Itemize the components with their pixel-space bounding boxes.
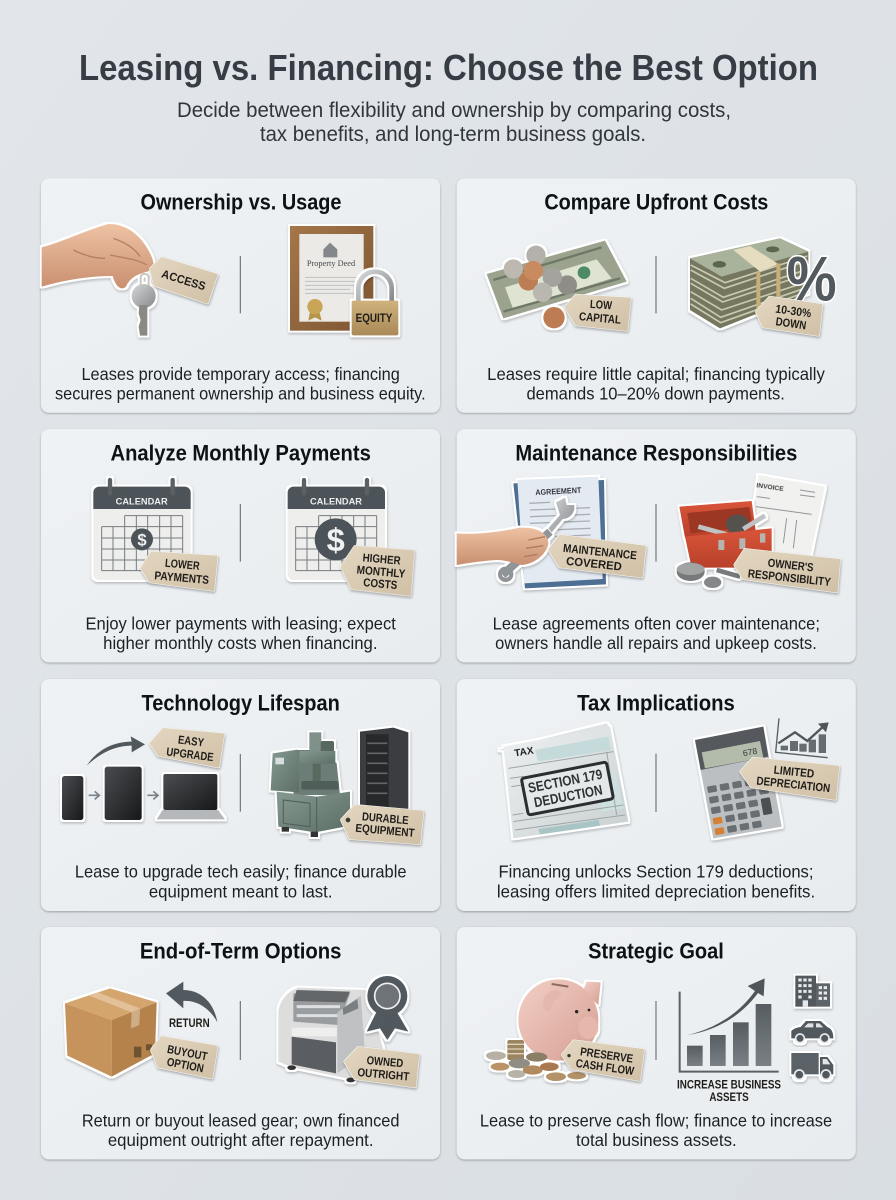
tag: low capital: LOW — [590, 298, 612, 312]
text: ownership summary: Leases provide temporary access; financing — [81, 364, 400, 384]
panel: compare upfront costs — [457, 178, 856, 413]
tag: durable equipment — [342, 806, 423, 843]
icon: award ribbon — [367, 976, 408, 1040]
text: monthly summary — [85, 613, 396, 653]
panel: ownership vs usage — [41, 178, 440, 413]
icon: tablet — [105, 767, 142, 820]
icon: car — [791, 1021, 833, 1043]
tag: maintenance covered: COVERED — [565, 555, 622, 574]
tag: preserve cash flow: CASH FLOW — [575, 1057, 635, 1078]
text: upfront summary: Leases require little capital; financing typically — [487, 364, 825, 384]
icon: truck — [791, 1053, 833, 1079]
icon: tax form with stamp: SECTION 179 — [527, 766, 604, 796]
text: ownership summary: secures permanent ownership and business equity. — [55, 383, 426, 403]
icon: piggy bank with coins — [486, 979, 601, 1081]
icon: cardboard box — [65, 988, 157, 1077]
icon: invoice — [749, 475, 825, 558]
heading: compare upfront costs: Compare Upfront Costs — [544, 189, 768, 214]
icon: small arrow one — [89, 791, 99, 799]
heading: tax implications: Tax Implications — [577, 691, 735, 716]
subtitle: Decide between flexibility and ownership by comparing costs, — [177, 99, 731, 122]
tag: owner's responsibility: OWNER'S — [767, 557, 814, 574]
tag: 10-30% down: 10-30% — [775, 303, 813, 321]
tag: low capital — [566, 295, 630, 330]
title: Leasing vs. Financing: Choose the Best Option — [79, 47, 818, 88]
tag: limited depreciation — [741, 758, 838, 799]
heading: strategic goal: Strategic Goal — [588, 938, 724, 963]
text: end-of-term summary: equipment outright after repayment. — [108, 1130, 373, 1150]
icon: upgrade arrow — [87, 736, 145, 766]
text: upfront summary — [487, 364, 825, 403]
icon: hand holding key — [42, 224, 156, 336]
tag: access — [151, 258, 217, 303]
panel: end-of-term options — [41, 927, 440, 1159]
tag: owned outright: OWNED — [366, 1054, 404, 1070]
label: increase business assets — [677, 1078, 781, 1104]
tag: higher monthly costs: HIGHER — [362, 551, 402, 568]
icon: owned machine — [278, 988, 383, 1082]
text: maintenance summary — [493, 613, 820, 653]
tag: maintenance covered: MAINTENANCE — [562, 542, 638, 563]
tag: limited depreciation: LIMITED — [773, 764, 815, 781]
icon: framed property deed — [290, 226, 373, 331]
text: end-of-term summary: Return or buyout leased gear; own financed — [82, 1111, 399, 1131]
text: tax summary — [497, 862, 815, 901]
icon: dollar bill and coins — [487, 241, 627, 318]
tag: durable equipment: EQUIPMENT — [355, 822, 415, 840]
text: technology summary: equipment meant to last. — [149, 881, 332, 901]
tag: 10-30% down — [757, 297, 822, 335]
icon: tax form with stamp: DEDUCTION — [533, 781, 604, 810]
icon: agreement documents: AGREEMENT — [535, 486, 582, 497]
text: technology summary: Lease to upgrade tech easily; finance durable — [75, 862, 406, 882]
icon: calendar large dollar: $ — [327, 521, 345, 558]
text: ownership summary — [55, 364, 426, 403]
panel: analyze monthly payments — [41, 429, 440, 662]
heading: maintenance responsibilities: Maintenance Responsibilities — [515, 441, 797, 466]
panel: strategic goal — [457, 927, 856, 1159]
icon: small growth chart — [776, 718, 829, 758]
icon: calculator — [695, 727, 782, 838]
tag: preserve cash flow: PRESERVE — [579, 1045, 634, 1066]
tag: lower payments: LOWER — [165, 557, 201, 573]
icon: invoice: INVOICE — [756, 482, 785, 493]
tag: 10-30% down: DOWN — [775, 315, 807, 332]
tag: owner's responsibility: RESPONSIBILITY — [747, 567, 832, 589]
tag: low capital: CAPITAL — [578, 310, 621, 327]
heading: analyze monthly payments: Analyze Monthly Payments — [110, 441, 371, 466]
icon: calendar large dollar: CALENDAR — [310, 496, 363, 506]
icon: calculator: 678 — [742, 746, 758, 758]
tag: buyout option: BUYOUT — [166, 1043, 208, 1063]
icon: laptop — [157, 774, 225, 819]
tag: higher monthly costs: MONTHLY — [356, 564, 406, 581]
tag: owner's responsibility — [735, 550, 839, 592]
icon: padlock equity: EQUITY — [356, 312, 393, 325]
icon: server rack — [360, 728, 408, 809]
tag: owned outright — [345, 1048, 418, 1087]
icon: small arrow two — [147, 791, 158, 799]
tag: access: ACCESS — [160, 268, 207, 293]
heading: ownership vs usage: Ownership vs. Usage — [140, 189, 341, 214]
label: increase business assets: ASSETS — [709, 1091, 749, 1104]
icon: calendar small dollar: CALENDAR — [116, 496, 168, 506]
tag: lower payments: PAYMENTS — [154, 569, 210, 587]
icon: hand with wrench — [457, 498, 574, 580]
subtitle — [177, 99, 731, 146]
tag: buyout option: OPTION — [166, 1056, 205, 1075]
text: tax summary: leasing offers limited depreciation benefits. — [497, 881, 815, 901]
text: monthly summary: Enjoy lower payments with leasing; expect — [85, 613, 396, 633]
icon: penny — [543, 307, 565, 328]
text: monthly summary: higher monthly costs when financing. — [103, 633, 377, 653]
icon: return arrow — [166, 982, 217, 1022]
tag: durable equipment: DURABLE — [361, 810, 409, 827]
text: upfront summary: demands 10–20% down payments. — [526, 383, 785, 403]
icon: agreement documents — [513, 477, 606, 588]
icon: calendar small dollar: $ — [137, 530, 147, 549]
tag: preserve cash flow — [563, 1041, 643, 1080]
icon: framed property deed: Property Deed — [307, 259, 355, 268]
icon: industrial machine — [271, 732, 350, 837]
heading: technology lifespan: Technology Lifespan — [141, 691, 340, 716]
label: increase business assets: INCREASE BUSINESS — [677, 1078, 781, 1091]
text: technology summary — [75, 862, 406, 901]
text: tax summary: Financing unlocks Section 179 deductions; — [498, 862, 813, 882]
icon: building — [795, 976, 830, 1007]
tag: owned outright: OUTRIGHT — [357, 1066, 410, 1084]
icon: padlock equity — [352, 272, 398, 335]
panel: technology lifespan — [41, 679, 440, 911]
tag: easy upgrade — [151, 729, 223, 767]
tag: lower payments — [142, 552, 217, 590]
subtitle: tax benefits, and long-term business goals. — [260, 123, 646, 146]
tag: limited depreciation: DEPRECIATION — [756, 774, 831, 795]
tag: maintenance covered — [549, 536, 645, 577]
tag: easy upgrade: EASY — [177, 733, 205, 750]
panel: maintenance responsibilities — [457, 429, 856, 662]
text: end-of-term summary — [82, 1111, 399, 1150]
icon: tax form with stamp — [498, 723, 628, 838]
icon: calendar small dollar — [93, 480, 191, 580]
text: maintenance summary: owners handle all repairs and upkeep costs. — [495, 633, 817, 653]
label: return: RETURN — [169, 1017, 210, 1030]
tag: higher monthly costs — [342, 547, 413, 595]
panel: tax implications — [457, 679, 856, 911]
chart: business asset growth — [680, 978, 779, 1072]
icon: cash stack — [690, 238, 808, 328]
heading: end-of-term options: End-of-Term Options — [140, 938, 341, 963]
icon: red toolbox with parts — [677, 501, 772, 588]
text: strategic summary — [480, 1111, 832, 1150]
text: maintenance summary: Lease agreements often cover maintenance; — [493, 613, 820, 633]
tag: buyout option — [152, 1037, 217, 1078]
icon: calendar large dollar — [288, 480, 385, 580]
tag: higher monthly costs: COSTS — [363, 576, 398, 592]
icon: tax form with stamp: TAX — [514, 746, 535, 759]
text: strategic summary: total business assets. — [576, 1130, 737, 1150]
icon: phone — [62, 776, 83, 820]
icon: percent sign: % — [787, 245, 837, 315]
tag: easy upgrade: UPGRADE — [166, 745, 214, 764]
text: strategic summary: Lease to preserve cash flow; finance to increase — [480, 1111, 832, 1131]
